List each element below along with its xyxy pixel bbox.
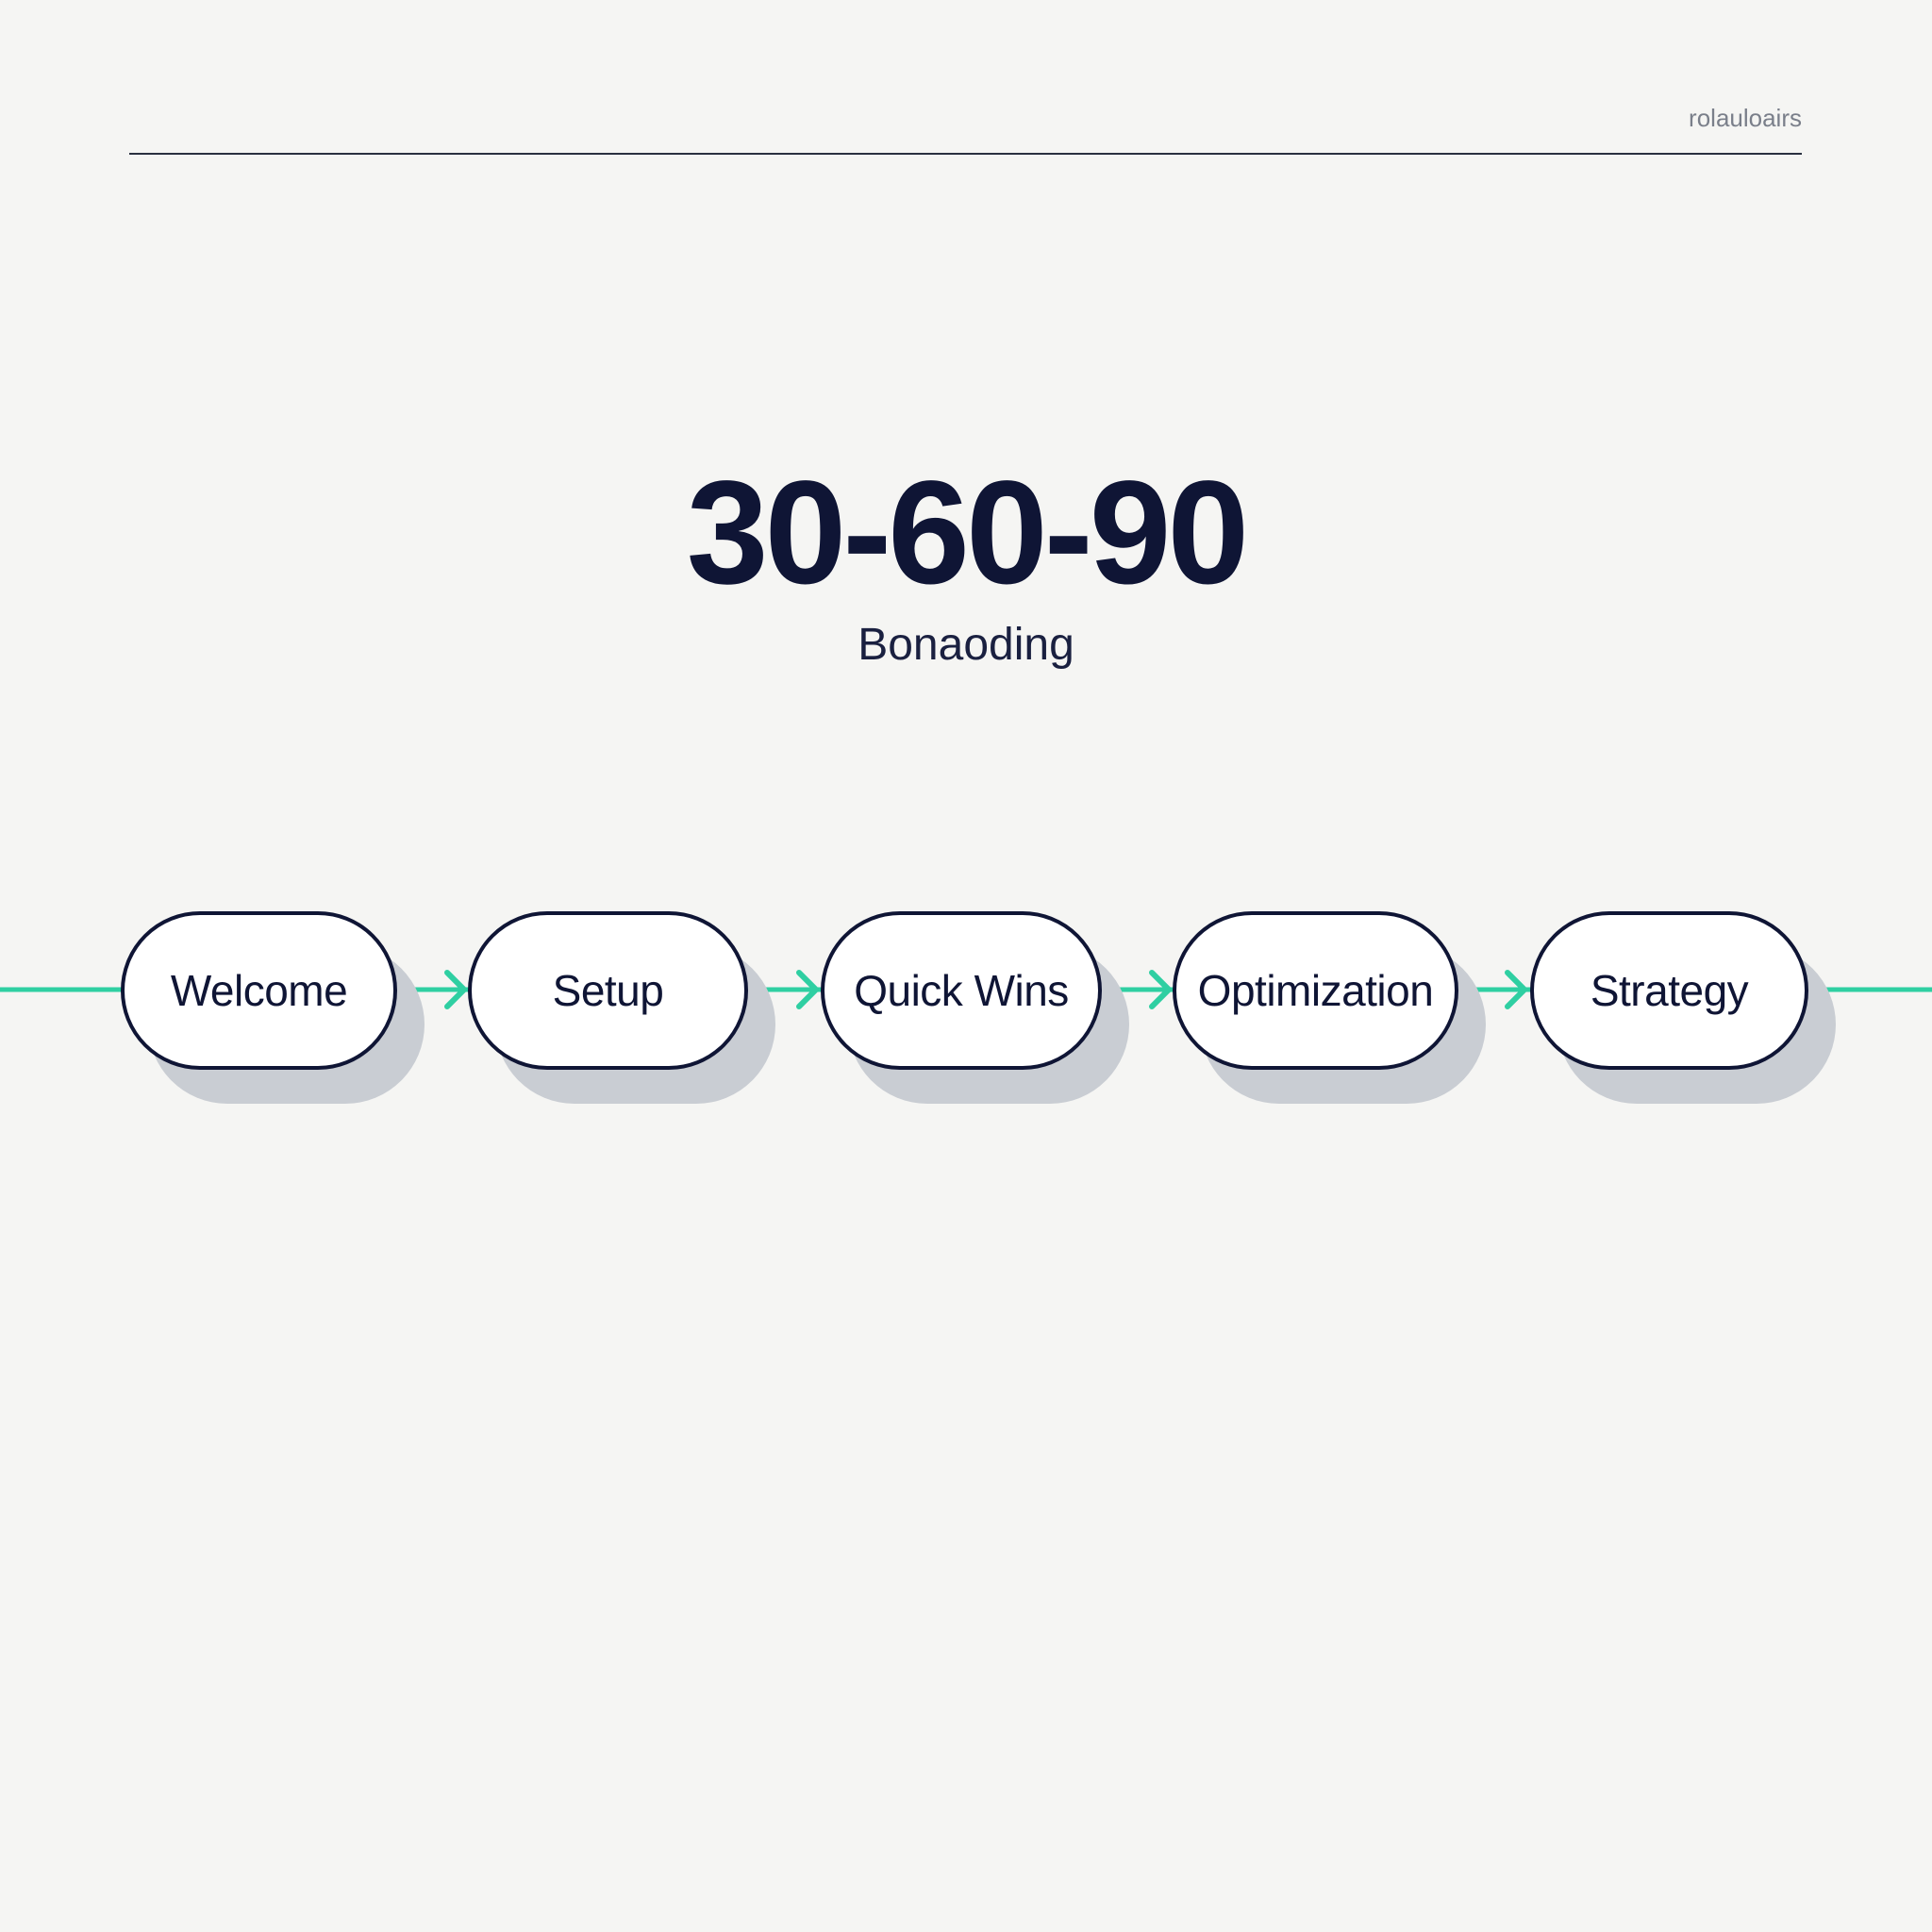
step: Optimization: Optimization xyxy=(1198,966,1433,1015)
step: Welcome: Welcome xyxy=(171,966,347,1015)
step: Strategy xyxy=(1530,911,1808,1070)
title: 30-60-90 xyxy=(687,451,1245,615)
step: Optimization xyxy=(1173,911,1458,1070)
step: Quick Wins xyxy=(821,911,1102,1070)
step: Strategy: Strategy xyxy=(1591,966,1748,1015)
process flow xyxy=(0,970,1932,1009)
step: Quick Wins: Quick Wins xyxy=(854,966,1069,1015)
shadows xyxy=(148,945,425,1104)
step: Setup: Setup xyxy=(553,966,663,1015)
step: Setup xyxy=(468,911,748,1070)
subtitle: Bonaoding xyxy=(858,620,1074,670)
header rule xyxy=(129,153,1802,155)
top-right label: rolauloairs xyxy=(1689,104,1802,132)
step: Welcome xyxy=(121,911,397,1070)
